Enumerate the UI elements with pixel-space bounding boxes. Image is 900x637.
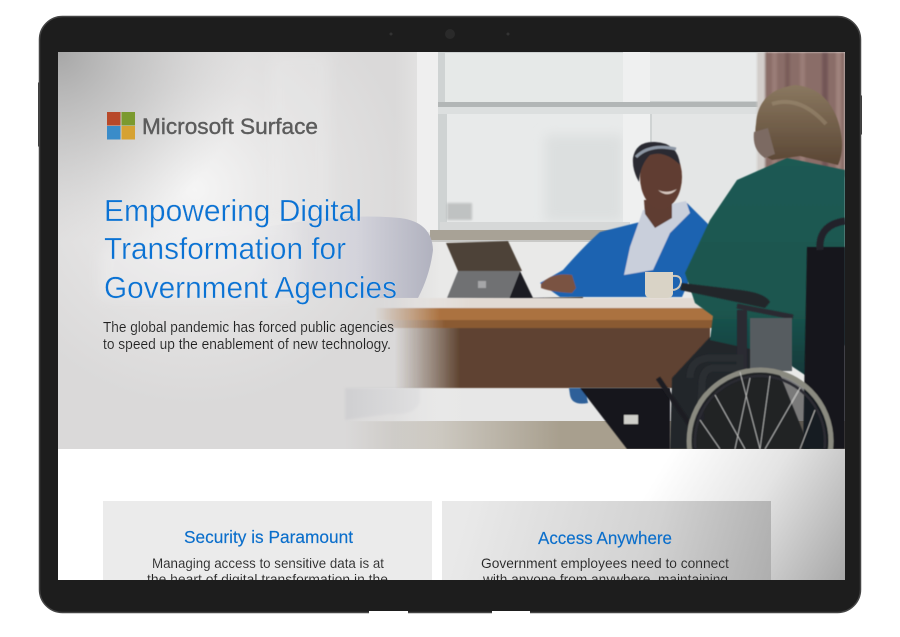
title	[104, 193, 397, 305]
card body: security: the heart of digital transformation in the	[147, 571, 388, 587]
hero photo background	[58, 52, 845, 449]
lower wall and carpet	[345, 388, 845, 449]
card body: access: with anyone from anywhere, maintaining	[482, 571, 728, 587]
surface laptop on desk	[446, 241, 583, 299]
window and wall	[417, 52, 758, 449]
card: Security is Paramount	[103, 501, 432, 587]
card body: access	[482, 558, 729, 580]
title: Government Agencies	[104, 270, 397, 305]
woman's legs	[569, 388, 670, 449]
lower content section background	[58, 449, 845, 587]
card body: security	[147, 558, 388, 580]
wheelchair	[656, 217, 845, 449]
title: Empowering Digital	[104, 193, 362, 228]
wooden table	[378, 297, 714, 389]
curtain	[757, 52, 845, 177]
card body: security: Managing access to sensitive data is at	[152, 555, 384, 571]
coffee mug	[645, 272, 681, 298]
Microsoft Surface logo: Microsoft Surface	[142, 114, 318, 139]
woman with cardigan	[540, 142, 712, 297]
faded office chair	[318, 216, 433, 418]
subtitle	[103, 320, 394, 353]
subtitle: to speed up the enablement of new technology.	[103, 337, 391, 353]
card heading: Access Anywhere: Access Anywhere	[538, 528, 672, 548]
subtitle: The global pandemic has forced public agencies	[103, 320, 394, 336]
card heading: Security is Paramount: Security is Paramount	[184, 527, 353, 547]
card body: access: Government employees need to connect	[481, 555, 729, 571]
card: Access Anywhere	[442, 501, 771, 587]
person in wheelchair	[670, 85, 845, 449]
title: Transformation for	[104, 231, 346, 266]
